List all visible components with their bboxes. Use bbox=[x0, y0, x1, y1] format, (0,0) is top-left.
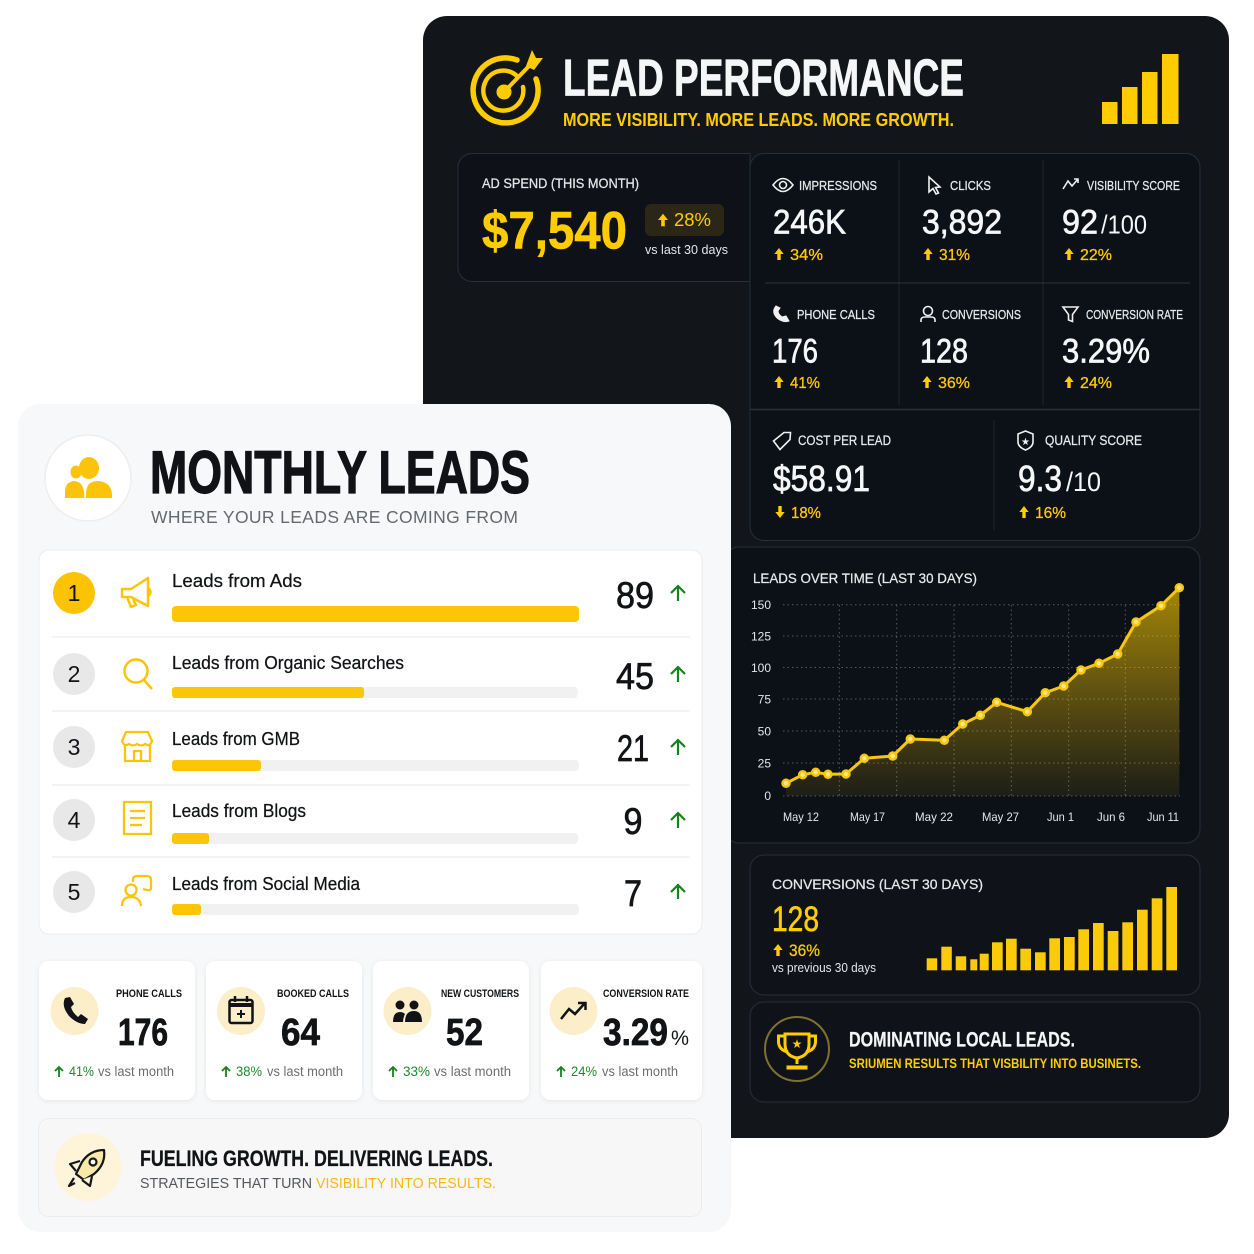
row: leads from organic searches: 45 bbox=[616, 656, 654, 697]
cta heading: FUELING GROWTH. DELIVERING LEADS. bbox=[140, 1146, 493, 1171]
stat card: new customers: vs last month bbox=[434, 1064, 511, 1079]
stat card: phone calls: 176 bbox=[118, 1012, 168, 1054]
ad spend comparison: vs last 30 days bbox=[645, 242, 728, 257]
subheading: where your leads: WHERE YOUR LEADS ARE COMING FROM bbox=[151, 507, 518, 527]
conversions value: 128 bbox=[772, 900, 819, 939]
line chart bbox=[751, 584, 1183, 824]
stat card: phone calls: vs last month bbox=[98, 1064, 174, 1079]
line chart: May 22 bbox=[915, 810, 953, 824]
row: leads from gmb bbox=[53, 726, 685, 771]
metric: quality score bbox=[1018, 431, 1142, 522]
ad spend label: AD SPEND (THIS MONTH) bbox=[482, 175, 639, 191]
stat card: booked calls: 38% bbox=[236, 1064, 262, 1079]
conversions comparison: vs previous 30 days bbox=[772, 961, 876, 975]
metric: conversion rate bbox=[1062, 307, 1183, 392]
metric: quality score: 16% bbox=[1035, 505, 1066, 522]
line chart: 125 bbox=[751, 630, 771, 644]
panel: lead performance bbox=[423, 16, 1229, 1138]
stat card: conversion rate: vs last month bbox=[602, 1064, 678, 1079]
line chart: 25 bbox=[758, 756, 771, 770]
metric: clicks: 3,892 bbox=[922, 204, 1002, 242]
row: leads from blogs: 9 bbox=[624, 801, 642, 842]
row: leads from social media: 5 bbox=[68, 879, 80, 905]
ad spend change badge bbox=[645, 204, 724, 236]
bar chart bbox=[927, 887, 1177, 970]
metric: impressions: IMPRESSIONS bbox=[799, 178, 877, 193]
line chart: May 12 bbox=[783, 810, 819, 824]
line chart: 50 bbox=[758, 724, 771, 738]
stat card: phone calls: PHONE CALLS bbox=[116, 988, 182, 1000]
stat card: new customers bbox=[373, 961, 529, 1100]
metric: conversion rate: CONVERSION RATE bbox=[1086, 307, 1183, 322]
heading: monthly leads: MONTHLY LEADS bbox=[150, 439, 530, 506]
metric: visibility score: 92 bbox=[1062, 204, 1098, 242]
stat card: conversion rate: 24% bbox=[571, 1064, 597, 1079]
row: leads from ads: Leads from Ads bbox=[172, 571, 302, 591]
row: leads from social media: Leads from Social Media bbox=[172, 874, 361, 894]
row: leads from organic searches: Leads from Organic Searches bbox=[172, 653, 404, 673]
line chart: Jun 6 bbox=[1097, 810, 1125, 824]
stat card: phone calls bbox=[39, 961, 195, 1100]
panel: leads over time bbox=[725, 547, 1200, 843]
heading: lead performance: LEAD PERFORMANCE bbox=[563, 50, 964, 108]
line chart: May 17 bbox=[850, 810, 885, 824]
metric: visibility score: /100 bbox=[1101, 210, 1147, 240]
icon: target with arrow bbox=[473, 50, 543, 123]
conversions change: 36% bbox=[789, 942, 820, 960]
icon: trophy bbox=[765, 1017, 829, 1081]
row: leads from organic searches bbox=[53, 653, 685, 698]
row: leads from social media bbox=[53, 871, 685, 915]
line chart: 100 bbox=[751, 661, 771, 675]
stat card: new customers: 52 bbox=[446, 1012, 483, 1054]
icon: people badge bbox=[45, 435, 131, 521]
conversions title: CONVERSIONS (LAST 30 DAYS) bbox=[772, 876, 983, 892]
panel: conversions last 30 days bbox=[750, 855, 1200, 995]
metric: quality score: 9.3 bbox=[1018, 458, 1062, 499]
metric: visibility score bbox=[1062, 178, 1180, 264]
icon: trophy: ★ bbox=[792, 1037, 802, 1051]
line chart: Jun 11 bbox=[1147, 810, 1179, 824]
cta subheading: STRATEGIES THAT TURN bbox=[140, 1176, 312, 1192]
row: leads from social media: 7 bbox=[624, 873, 642, 914]
stat card: conversion rate: CONVERSION RATE bbox=[603, 988, 689, 1000]
row: leads from gmb: 3 bbox=[68, 734, 80, 760]
metric: conversions: CONVERSIONS bbox=[942, 307, 1021, 322]
stat card: new customers: NEW CUSTOMERS bbox=[441, 988, 519, 1000]
conversions change bbox=[773, 942, 820, 960]
panel: dominating local leads bbox=[750, 1002, 1200, 1102]
stat card: booked calls: 64 bbox=[281, 1012, 320, 1054]
metric: phone calls: 176 bbox=[772, 332, 818, 370]
metric: phone calls: PHONE CALLS bbox=[797, 307, 875, 322]
line chart: Jun 1 bbox=[1047, 810, 1074, 824]
panel: monthly leads bbox=[18, 404, 731, 1232]
stat card: conversion rate bbox=[541, 961, 702, 1100]
line chart: 150 bbox=[751, 598, 771, 612]
panel: fueling growth bbox=[38, 1118, 702, 1216]
icon: bar signal bbox=[1102, 54, 1178, 124]
metric: impressions: 246K bbox=[773, 204, 846, 242]
panel: metrics grid bbox=[750, 154, 1200, 540]
cta highlighted text: VISIBILITY INTO RESULTS. bbox=[316, 1176, 496, 1192]
metric: visibility score: VISIBILITY SCORE bbox=[1087, 178, 1180, 193]
metric: impressions bbox=[773, 178, 877, 264]
cta heading: DOMINATING LOCAL LEADS. bbox=[849, 1028, 1075, 1052]
row: leads from ads: 1 bbox=[68, 580, 80, 606]
row: leads from ads: 89 bbox=[616, 575, 654, 616]
stat card: conversion rate: 3.29 bbox=[603, 1012, 668, 1054]
row: leads from gmb: Leads from GMB bbox=[172, 729, 300, 749]
metric: quality score: /10 bbox=[1066, 467, 1101, 497]
stat card: booked calls bbox=[206, 961, 362, 1100]
metric: visibility score: 22% bbox=[1080, 247, 1112, 264]
line chart: 0 bbox=[764, 789, 771, 803]
metric: cost per lead: $58.91 bbox=[773, 458, 870, 499]
row: leads from blogs: Leads from Blogs bbox=[172, 801, 306, 821]
metric: cost per lead: COST PER LEAD bbox=[798, 433, 891, 448]
metric: cost per lead bbox=[773, 432, 891, 522]
stat card: booked calls: BOOKED CALLS bbox=[277, 988, 349, 1000]
ad spend value: $7,540 bbox=[482, 202, 627, 260]
row: leads from ads bbox=[53, 571, 685, 622]
metric: clicks bbox=[922, 177, 1002, 264]
chart title: LEADS OVER TIME (LAST 30 DAYS) bbox=[753, 570, 977, 586]
metric: clicks: 31% bbox=[939, 247, 970, 264]
metric: quality score: ★ bbox=[1021, 437, 1030, 448]
metric: phone calls bbox=[772, 306, 875, 392]
stat card: conversion rate: % bbox=[671, 1027, 689, 1050]
stat card: new customers: 33% bbox=[403, 1064, 430, 1079]
metric: phone calls: 41% bbox=[790, 375, 820, 392]
metric: conversions: 128 bbox=[920, 332, 968, 370]
stat card: phone calls: 41% bbox=[69, 1064, 94, 1079]
ad spend change badge: 28% bbox=[674, 210, 711, 230]
subheading: more visibility: MORE VISIBILITY. MORE LEADS. MORE GROWTH. bbox=[563, 110, 954, 130]
metric: conversions: 36% bbox=[938, 375, 970, 392]
row: leads from organic searches: 2 bbox=[68, 661, 80, 687]
panel: lead sources bbox=[39, 550, 702, 934]
row: leads from gmb: 21 bbox=[617, 728, 649, 769]
metric: clicks: CLICKS bbox=[950, 178, 991, 193]
line chart: May 27 bbox=[982, 810, 1019, 824]
metric: cost per lead: 18% bbox=[791, 505, 821, 522]
icon: rocket bbox=[54, 1133, 122, 1201]
line chart: 75 bbox=[758, 692, 771, 706]
stat card: booked calls: vs last month bbox=[267, 1064, 343, 1079]
panel: ad spend bbox=[458, 154, 750, 282]
metric: quality score: QUALITY SCORE bbox=[1045, 433, 1142, 448]
metric: conversion rate: 3.29% bbox=[1062, 332, 1150, 370]
row: leads from blogs: 4 bbox=[68, 807, 81, 833]
metric: impressions: 34% bbox=[790, 247, 823, 264]
row: leads from blogs bbox=[53, 799, 685, 844]
cta subheading: SRIUMEN RESULTS THAT VISBILITY INTO BUSINETS. bbox=[849, 1055, 1141, 1071]
metric: conversions bbox=[920, 306, 1021, 392]
metric: conversion rate: 24% bbox=[1080, 375, 1112, 392]
